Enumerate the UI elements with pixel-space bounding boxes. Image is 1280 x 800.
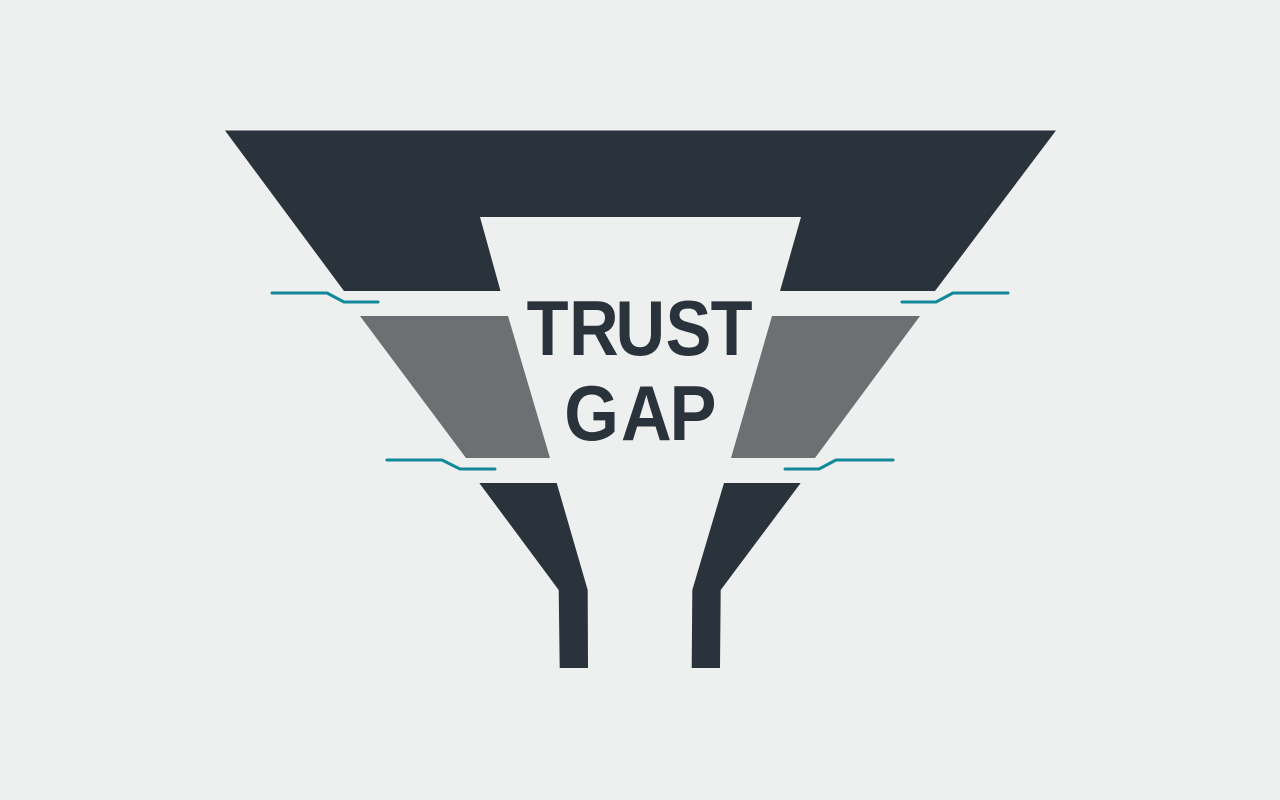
right middle segment: [731, 316, 920, 458]
upper left connector: [272, 293, 378, 302]
lower left connector: [387, 460, 495, 469]
right bottom spout: [692, 483, 801, 668]
title text: [527, 284, 753, 457]
funnel graphic: [225, 130, 1056, 668]
title line: GAP: GAP: [564, 370, 716, 457]
left middle segment: [360, 316, 550, 458]
lower right connector: [785, 460, 893, 469]
teal connector lines: [272, 293, 1008, 469]
title line: TRUST: TRUST: [527, 284, 753, 372]
left bottom spout: [479, 483, 588, 668]
top funnel band: [225, 130, 1056, 291]
upper right connector: [902, 293, 1008, 302]
